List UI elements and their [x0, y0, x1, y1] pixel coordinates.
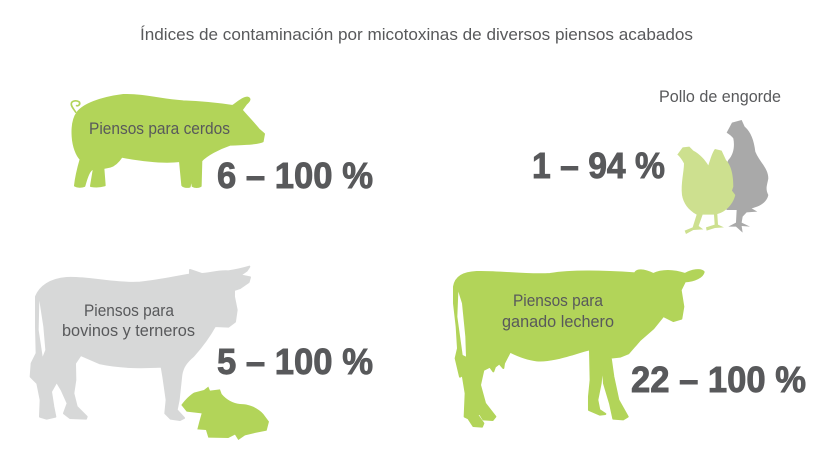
icon: pig silhouette: [71, 95, 264, 187]
panel: cattle and calf feed: bovinos y terneros: [62, 322, 195, 340]
panel: cattle and calf feed: [31, 267, 373, 440]
panel: dairy cattle feed: [454, 270, 806, 427]
panel: broiler feed: [532, 88, 781, 234]
value: dairy range: 22 – 100 %: [631, 359, 806, 400]
value: cattle range: 5 – 100 %: [217, 341, 373, 382]
label: dairy feed: Piensos para: [513, 292, 604, 310]
panel: dairy cattle feed: ganado lechero: [502, 313, 614, 331]
label: broiler: Pollo de engorde: [659, 88, 781, 106]
value: broiler range: 1 – 94 %: [532, 145, 665, 186]
label: cattle feed: Piensos para: [84, 302, 175, 320]
icon: grey cow: [31, 267, 250, 420]
value: pig range: 6 – 100 %: [217, 155, 373, 196]
icon: green hen: [677, 147, 735, 234]
panel: pig feed: [71, 95, 373, 196]
label: pig feed: Piensos para cerdos: [89, 120, 230, 138]
title: Índices de contaminación por micotoxinas de diversos piensos acabados: [140, 25, 693, 44]
icon: green dairy cow: [454, 270, 704, 427]
icon: grey hen: [720, 120, 768, 233]
icon: green calf: [181, 387, 269, 440]
